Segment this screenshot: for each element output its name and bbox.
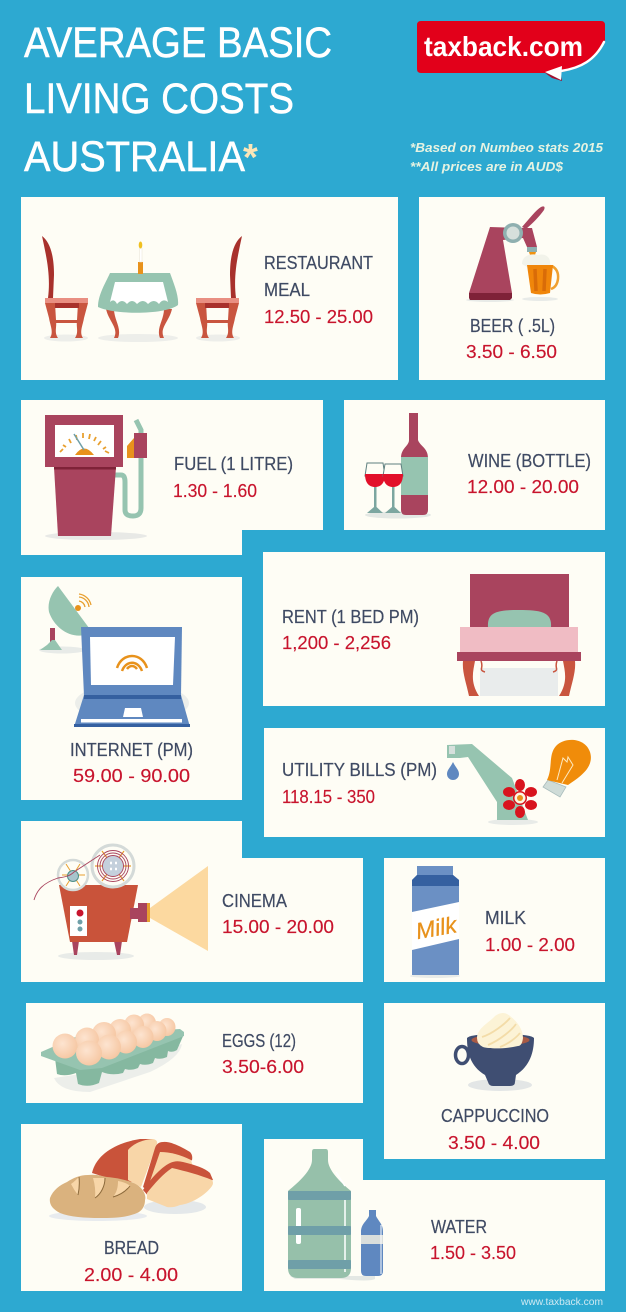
- price: 1,200 - 2,256: [282, 633, 391, 653]
- price: 118.15 - 350: [282, 787, 375, 807]
- label: MILK: [485, 908, 526, 928]
- panel: eggs: [26, 1003, 363, 1103]
- label: BEER ( .5L): [470, 316, 555, 336]
- icon: dining table and chairs: [42, 236, 242, 342]
- panel: internet: [21, 577, 242, 800]
- panel: utility bills: [264, 728, 605, 837]
- price: 15.00 - 20.00: [222, 917, 334, 937]
- price: 3.50 - 6.50: [466, 342, 557, 362]
- icon: satellite dish and laptop: [39, 586, 190, 727]
- panel: beer: [419, 197, 605, 380]
- panel: bread: [21, 1124, 242, 1291]
- price: 12.00 - 20.00: [467, 477, 579, 497]
- title: LIVING COSTS: [24, 75, 294, 123]
- label: WINE (BOTTLE): [468, 451, 591, 471]
- icon: bread loaf and slices: [49, 1139, 213, 1221]
- label: RENT (1 BED PM): [282, 607, 419, 627]
- icon: cappuccino cup: [456, 1013, 534, 1091]
- price: 12.50 - 25.00: [264, 307, 373, 327]
- icon: film projector: [34, 845, 208, 960]
- icon: milk carton: Milk: [414, 911, 460, 944]
- panel: fuel: [21, 400, 323, 555]
- label: UTILITY BILLS (PM): [282, 760, 437, 780]
- title: *: [243, 137, 258, 179]
- footnotes: [410, 141, 604, 174]
- label: EGGS (12): [222, 1031, 296, 1051]
- price: 1.50 - 3.50: [430, 1243, 516, 1263]
- footnotes: *Based on Numbeo stats 2015: [410, 141, 604, 155]
- logo: taxback.com: [417, 21, 605, 81]
- panel: cappuccino: [384, 1003, 605, 1159]
- title: [24, 19, 332, 181]
- label: CAPPUCCINO: [441, 1106, 549, 1126]
- title: AUSTRALIA: [24, 133, 245, 181]
- panel: cinema: [21, 821, 363, 982]
- label: BREAD: [104, 1238, 159, 1258]
- price: 3.50 - 4.00: [448, 1133, 540, 1153]
- icon: fuel pump: [45, 415, 147, 540]
- label second line: MEAL: [264, 280, 310, 300]
- panel: rent: [263, 552, 605, 706]
- panel: restaurant meal: [21, 197, 398, 380]
- panel: water: [264, 1139, 605, 1291]
- price: 3.50-6.00: [222, 1057, 304, 1077]
- price: 1.00 - 2.00: [485, 935, 575, 955]
- label: WATER: [431, 1217, 487, 1237]
- label: INTERNET (PM): [70, 740, 193, 760]
- logo: taxback.com: taxback.com: [424, 31, 583, 62]
- icon: beer tap and mug: [466, 206, 558, 302]
- icon: water bottles: [288, 1149, 383, 1280]
- panel: milk: [384, 858, 605, 982]
- icon: milk carton: [410, 866, 460, 978]
- icon: egg tray: [41, 1014, 184, 1092]
- label: CINEMA: [222, 891, 287, 911]
- price: 2.00 - 4.00: [84, 1265, 178, 1285]
- footnotes: **All prices are in AUD$: [410, 160, 564, 174]
- icon: wine bottle and glasses: [365, 413, 431, 518]
- icon: bed: [457, 574, 581, 696]
- label: FUEL (1 LITRE): [174, 454, 293, 474]
- label: RESTAURANT: [264, 253, 373, 273]
- footer url: www.taxback.com: [520, 1296, 603, 1308]
- title: AVERAGE BASIC: [24, 19, 332, 67]
- panel: wine: [344, 400, 605, 530]
- price: 59.00 - 90.00: [73, 766, 190, 786]
- price: 1.30 - 1.60: [173, 481, 257, 501]
- icon: tap, flower and light bulb: [447, 740, 591, 825]
